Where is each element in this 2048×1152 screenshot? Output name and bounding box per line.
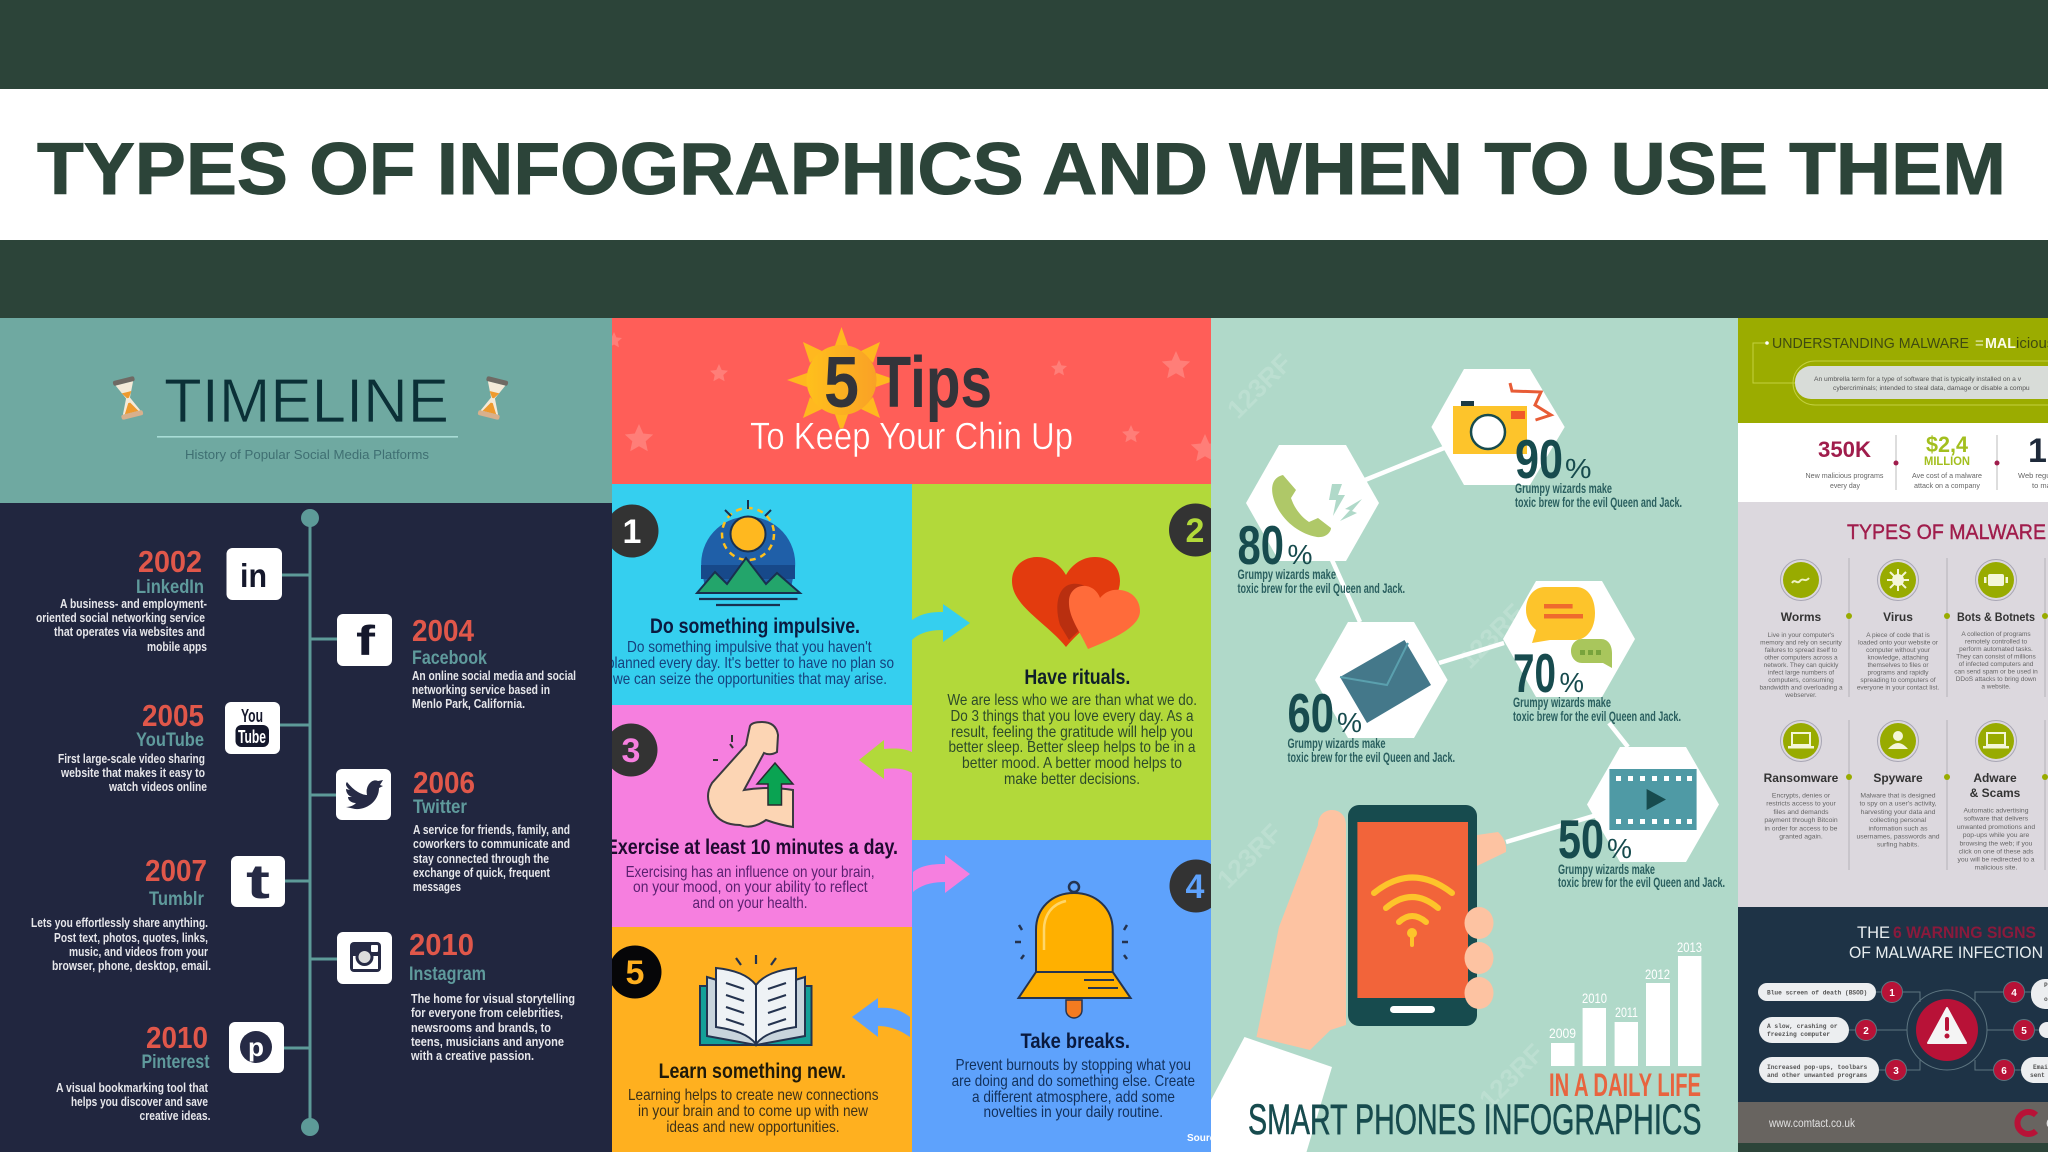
card: worms: Live in your computer's [1768, 632, 1835, 639]
malware stats [1806, 432, 2048, 490]
icon: chat bubbles [1526, 587, 1612, 668]
entry: Tumblr 2007: t [246, 856, 270, 909]
stat: 80%: % [1288, 539, 1312, 570]
entry: YouTube 2005: You [241, 706, 263, 726]
entry: Tumblr 2007: Post text, photos, quotes, links, [54, 930, 208, 945]
stat: 90%: % [1565, 453, 1592, 484]
card: adware and scams: you will be redirected to a [1957, 856, 2035, 864]
panel: smart phones infographic [1211, 318, 1738, 1152]
card: adware and scams: unwanted promotions and [1957, 824, 2035, 831]
tip 2: have rituals: better sleep. Better sleep helps to be in a [948, 739, 1196, 756]
card: ransomware: files and demands [1773, 809, 1829, 816]
entry: YouTube 2005: website that makes it easy to [60, 765, 205, 780]
card: bots and botnets: A collection of programs [1961, 631, 2031, 638]
card: adware and scams: Automatic advertising [1964, 808, 2029, 814]
tip 1: do something impulsive: Do something impulsive. [650, 615, 860, 638]
malware stats: Ave cost of a malware [1912, 471, 1982, 480]
warning signs 4 to 6: sent [2030, 1072, 2045, 1079]
warning signs 1 to 3: Blue screen of death (BSOD) [1767, 990, 1867, 996]
entry: Twitter 2006 [336, 765, 570, 894]
stat: 60%: % [1337, 707, 1362, 738]
heading: 6 warning signs [1849, 924, 2043, 962]
entry: Twitter 2006: coworkers to communicate and [413, 836, 570, 851]
footer: comtact: www.comtact.co.uk [1768, 1118, 1855, 1130]
card: worms: computers, consuming [1768, 677, 1834, 684]
warning signs 1 to 3: A slow, crashing or [1767, 1023, 1838, 1030]
bar chart: 2009-2013: 2009 [1549, 1025, 1576, 1041]
stock watermarks: 123RF [1473, 1038, 1549, 1114]
card: worms: bandwidth and overloading a [1759, 684, 1843, 692]
malware header: = [1975, 335, 1984, 352]
entry: Twitter 2006: exchange of quick, frequent [413, 865, 551, 880]
bar chart: 2009-2013: 2012 [1645, 966, 1670, 982]
card: adware and scams: Adware [1973, 771, 2017, 785]
icon: video film [1609, 769, 1697, 830]
warning connector lines [1849, 992, 2039, 1070]
warning signs 4 to 6: 5 [2021, 1026, 2027, 1037]
card: ransomware: Encrypts, denies or [1772, 792, 1831, 800]
tip 1: do something impulsive [606, 500, 894, 688]
stat: 60%: 60 [1288, 682, 1334, 744]
entry: Pinterest 2010: helps you discover and save [71, 1094, 208, 1109]
card: bots and botnets: can send spam or be used in [1954, 668, 2038, 676]
smart phones heading [1249, 1074, 1700, 1135]
entry: Tumblr 2007: music, and videos from your [69, 944, 208, 959]
card: virus: knowledge, attaching [1867, 654, 1929, 662]
malware stats: every day [1830, 481, 1860, 490]
card: adware and scams: malicious site. [1975, 864, 2017, 872]
entry: Pinterest 2010: creative ideas. [140, 1108, 210, 1123]
card: worms [1759, 560, 1843, 699]
entry: YouTube 2005 [58, 698, 280, 794]
card: adware and scams: browsing the web; if you [1960, 840, 2033, 848]
entry: Instagram 2010: 2010 [409, 927, 474, 962]
hexagon connector lines [1332, 448, 1628, 842]
malware header: An umbrella term for a type of software that is typically installed on a v [1814, 376, 2022, 383]
title band [0, 89, 2048, 240]
entry: Pinterest 2010: p [248, 1032, 264, 1062]
card: virus: programs and rapidly [1867, 670, 1929, 676]
card: ransomware: in order for access to be [1765, 826, 1838, 832]
arrow: tip 1 to tip 2 [912, 604, 970, 642]
card: ransomware: restricts access to your [1766, 800, 1836, 808]
card: spyware: Spyware [1873, 771, 1923, 785]
entry: Facebook 2004: 2004 [412, 613, 475, 648]
entry: Pinterest 2010: Pinterest [142, 1052, 210, 1073]
tip 3: exercise [604, 722, 898, 912]
tip 5: learn something new: Learning helps to create new connections [628, 1087, 878, 1104]
stat: 60%: toxic brew for the evil Queen and Jack. [1288, 749, 1455, 765]
card: bots and botnets: DDoS attacks to bring down [1956, 676, 2037, 683]
entry: Twitter 2006: 2006 [413, 765, 475, 800]
entry: LinkedIn 2002: 2002 [138, 544, 202, 579]
entry: LinkedIn 2002: that operates via websites and [54, 624, 205, 639]
arrow: tip 2 to tip 3 [859, 740, 912, 779]
malware stats: 1 [2028, 432, 2047, 470]
icon: envelope [1340, 640, 1431, 723]
card: virus: spreading to computers of [1860, 677, 1936, 684]
card: worms: memory and rely on security [1760, 640, 1843, 646]
footer: comtact [1768, 1112, 2048, 1134]
arrow: tip 4 to tip 5 [852, 998, 910, 1037]
warning signs 1 to 3: Increased pop-ups, toolbars [1767, 1064, 1868, 1071]
card: spyware: Malware that is designed [1860, 792, 1936, 800]
malware stats: attack on a company [1914, 481, 1980, 490]
hexagons [1246, 369, 1719, 862]
stat: 50% [1558, 820, 1724, 890]
panel: social media timeline [0, 318, 612, 1152]
stat: 70%: 70 [1513, 642, 1556, 704]
card: virus: computer without your [1866, 647, 1931, 654]
tip 4: take breaks: are doing and do something else. Create [952, 1073, 1195, 1090]
stat: 90%: Grumpy wizards make [1515, 480, 1612, 496]
tip 5: learn something new: Learn something new. [659, 1060, 846, 1083]
tip 4: take breaks: 4 [1186, 868, 1205, 906]
malware stats: New malicious programs [1806, 471, 1884, 480]
stat: 70%: % [1560, 667, 1584, 698]
card: worms: failures to spread itself to [1765, 647, 1838, 654]
bar chart: 2009-2013 [1549, 939, 1702, 1066]
warning signs 1 to 3: 3 [1893, 1066, 1899, 1077]
timeline heading [157, 367, 458, 462]
entry: Tumblr 2007: 2007 [145, 853, 207, 888]
heading: 6 warning signs: THE [1857, 924, 1890, 942]
entry: Pinterest 2010 [56, 1020, 284, 1123]
card: ransomware: granted again. [1779, 834, 1823, 840]
tip 2: have rituals: make better decisions. [1004, 771, 1140, 788]
icon: right hourglass [477, 376, 509, 420]
card: adware and scams [1957, 720, 2035, 872]
panel: 5 tips [604, 318, 1222, 1152]
subheading: To Keep Your Chin Up [750, 416, 1073, 458]
entry: Tumblr 2007: Tumblr [149, 889, 205, 910]
tip 1: do something impulsive: planned every day. It's better to have no plan so [607, 655, 894, 672]
tip 2: have rituals: We are less who we are than what we do. [947, 692, 1197, 709]
tip 4: take breaks [952, 860, 1222, 1144]
timeline heading: TIMELINE [164, 367, 449, 436]
card: bots and botnets [1954, 560, 2038, 690]
card: bots and botnets: of infected computers and [1959, 661, 2034, 668]
entry: YouTube 2005: YouTube [136, 730, 204, 751]
card: ransomware [1764, 720, 1839, 840]
background stars [606, 332, 1219, 461]
entry: LinkedIn 2002: mobile apps [147, 639, 207, 654]
entry: Instagram 2010: teens, musicians and anyone [411, 1034, 564, 1049]
tip 4: take breaks: a different atmosphere, add some [972, 1089, 1175, 1106]
stat: 70%: toxic brew for the evil Queen and Jack. [1513, 708, 1681, 724]
illustration: hand holding phone [1211, 805, 1506, 1152]
icon: telephone handset [1272, 475, 1362, 537]
timeline axis [280, 509, 337, 1136]
warning signs 4 to 6: 4 [2011, 988, 2017, 999]
warning signs 1 to 3: 2 [1863, 1026, 1869, 1037]
entry: Facebook 2004: Facebook [412, 648, 487, 669]
card: adware and scams: click on one of these ads [1959, 848, 2034, 856]
malware header: cybercriminals; intended to steal data, damage or disable a compu [1833, 385, 2030, 392]
stat: 90%: toxic brew for the evil Queen and Jack. [1515, 494, 1682, 510]
tip 5: learn something new: ideas and new opportunities. [666, 1119, 840, 1136]
card: bots and botnets: They can consist of millions [1956, 654, 2036, 660]
entry: LinkedIn 2002 [36, 544, 282, 654]
malware stats: 350K [1818, 437, 1871, 462]
tip 5: learn something new: 5 [626, 954, 644, 992]
card: virus: loaded onto your website or [1858, 640, 1939, 646]
malware header: UNDERSTANDING MALWARE [1772, 335, 1969, 352]
malware stats: MILLION [1924, 454, 1970, 468]
entry: Instagram 2010: newsrooms and brands, to [411, 1020, 551, 1035]
stock watermarks: 123RF [1211, 818, 1287, 894]
tip 3: exercise: on your mood, on your ability to reflect [633, 879, 868, 896]
tip 2: have rituals: 2 [1186, 512, 1204, 550]
stat: 50%: Grumpy wizards make [1558, 861, 1655, 877]
card: spyware: usernames, passwords and [1856, 834, 1940, 840]
tip 1: do something impulsive: 1 [623, 513, 641, 551]
warning signs 1 to 3: 1 [1889, 988, 1895, 999]
stat: 80%: toxic brew for the evil Queen and Jack. [1238, 580, 1405, 596]
warning signs 1 to 3: and other unwanted programs [1767, 1072, 1868, 1079]
warning signs 1 to 3: freezing computer [1767, 1031, 1830, 1038]
warning signs 4 to 6 [1994, 979, 2048, 1083]
timeline heading: History of Popular Social Media Platforms [185, 447, 430, 462]
tip 1: do something impulsive: Do something impulsive that you haven't [627, 639, 872, 656]
entry: Twitter 2006: stay connected through the [413, 851, 549, 866]
stat: 70%: Grumpy wizards make [1513, 694, 1611, 710]
smart phones heading: SMART PHONES INFOGRAPHICS [1248, 1096, 1702, 1144]
heading: 5 tips [826, 354, 990, 422]
tip 3: exercise: 3 [622, 732, 640, 770]
card: virus: themselves to files or [1867, 662, 1929, 669]
heading: 5 tips: Tips [876, 343, 992, 423]
card: virus: A piece of code that is [1866, 632, 1931, 639]
card: adware and scams: software that delivers [1964, 816, 2029, 822]
entry: LinkedIn 2002: in [240, 557, 267, 594]
tip 3: exercise: and on your health. [692, 895, 808, 912]
tip 2: have rituals: Do 3 things that you love every day. As a [950, 708, 1194, 725]
entry: Facebook 2004: Menlo Park, California. [412, 696, 525, 711]
stat: 60%: Grumpy wizards make [1288, 735, 1386, 751]
card: ransomware: Ransomware [1764, 771, 1839, 785]
warning signs 1 to 3 [1758, 982, 1906, 1083]
bar chart: 2009-2013: 2013 [1677, 939, 1702, 955]
entry: Facebook 2004: An online social media and social [412, 668, 576, 683]
smart phones heading: IN A DAILY LIFE [1549, 1067, 1701, 1103]
tip 4: take breaks: Source [1187, 1133, 1221, 1144]
icon: camera [1453, 383, 1551, 454]
tip 5: learn something new: in your brain and to come up with new [638, 1103, 868, 1120]
card: spyware: to spy on a user's activity, [1859, 800, 1937, 808]
entry: Twitter 2006: Twitter [413, 797, 468, 818]
tip 2: have rituals: better mood. A better mood helps to [962, 755, 1182, 772]
card: bots and botnets: remotely controlled to [1965, 638, 2027, 646]
entry: Tumblr 2007: browser, phone, desktop, email. [52, 958, 211, 973]
stat: 80%: 80 [1238, 514, 1284, 576]
card: worms: infect large numbers of [1768, 670, 1834, 676]
card: virus: everyone in your contact list. [1857, 684, 1939, 692]
card: spyware: information such as [1869, 826, 1928, 832]
card: bots and botnets: a website. [1981, 684, 2011, 690]
entry: Tumblr 2007 [31, 853, 285, 973]
tip 5: learn something new [608, 946, 878, 1136]
tip 1: do something impulsive: we can seize the opportunities that may arise. [612, 671, 887, 688]
malware stats: $2,4 [1926, 432, 1969, 457]
entry: Tumblr 2007: Lets you effortlessly share anything. [31, 915, 208, 930]
stat: 50%: 50 [1558, 808, 1604, 870]
warning signs 4 to 6: Emai [2033, 1064, 2048, 1071]
entry: Instagram 2010: The home for visual storytelling [411, 991, 575, 1006]
stat: 80%: Grumpy wizards make [1238, 566, 1336, 582]
stock watermarks [1211, 348, 1549, 1114]
bar chart: 2009-2013: 2010 [1582, 990, 1607, 1006]
entry: YouTube 2005: First large-scale video sharing [58, 751, 205, 766]
stat: 70% [1513, 654, 1680, 724]
entry: LinkedIn 2002: oriented social networking service [36, 610, 205, 625]
icon: warning triangle [1907, 990, 1987, 1070]
entry: Facebook 2004 [337, 613, 576, 711]
stat: 80% [1238, 526, 1404, 596]
entry: Facebook 2004: networking service based in [412, 682, 550, 697]
card: adware and scams: pop-ups while you are [1963, 832, 2029, 839]
entry: LinkedIn 2002: LinkedIn [136, 577, 204, 598]
arrow: tip 3 to tip 4 [913, 855, 970, 893]
heading: 6 warning signs: 6 WARNING SIGNS [1893, 924, 2036, 942]
entry: Pinterest 2010: 2010 [146, 1020, 208, 1055]
entry: Twitter 2006: messages [413, 879, 461, 894]
card: adware and scams: & Scams [1970, 786, 2021, 800]
tip 3: exercise: Exercising has an influence on your brain, [626, 864, 875, 881]
stock watermarks: 123RF [1453, 598, 1529, 674]
panel: understanding malware [1738, 318, 2048, 1143]
entry: YouTube 2005: 2005 [142, 698, 204, 733]
tip 4: take breaks: novelties in your daily routine. [984, 1104, 1163, 1121]
warning signs 4 to 6: 6 [2001, 1066, 2007, 1077]
warning signs 4 to 6: P [2044, 982, 2048, 989]
card: spyware [1856, 720, 1940, 848]
entry: Pinterest 2010: A visual bookmarking tool that [56, 1080, 209, 1095]
icon: sun [787, 327, 896, 433]
tip 2: have rituals: result, feeling the gratitude will help you [951, 724, 1193, 741]
card: worms: webserver. [1784, 692, 1817, 699]
stock watermarks: 123RF [1221, 348, 1297, 424]
card: spyware: harvesting your data and [1861, 809, 1936, 816]
card: spyware: surfing habits. [1877, 842, 1919, 848]
heading: 6 warning signs: OF MALWARE INFECTION [1849, 944, 2043, 962]
entry: Instagram 2010: with a creative passion. [410, 1048, 534, 1063]
stat: 50%: % [1607, 833, 1632, 864]
malware header: MAL [1985, 335, 2016, 352]
title band: TYPES OF INFOGRAPHICS AND WHEN TO USE THEM [37, 129, 2006, 210]
tip 3: exercise: Exercise at least 10 minutes a day. [606, 836, 898, 859]
stat: 90%: 90 [1515, 428, 1563, 490]
card: ransomware: payment through Bitcoin [1764, 817, 1838, 824]
card: bots and botnets: Bots & Botnets [1957, 610, 2035, 624]
card: worms: other computers across a [1764, 654, 1838, 662]
card: worms: Worms [1781, 610, 1822, 624]
entry: Instagram 2010: for everyone from celebrities, [411, 1005, 563, 1020]
card: virus [1857, 560, 1939, 692]
entry: Instagram 2010: Instagram [409, 964, 486, 985]
warning signs 4 to 6: o [2044, 996, 2048, 1003]
entry: YouTube 2005: Tube [238, 727, 266, 747]
tip 2: have rituals [947, 504, 1222, 788]
card: spyware: collecting personal [1870, 817, 1927, 824]
entry: Facebook 2004: f [356, 617, 376, 664]
stat: 90% [1515, 440, 1682, 510]
icon: left hourglass [112, 376, 144, 420]
card: bots and botnets: perform automated tasks. [1959, 646, 2033, 653]
malware header [1753, 335, 2048, 405]
tip 4: take breaks: Take breaks. [1020, 1030, 1130, 1053]
card: virus: Virus [1883, 610, 1913, 624]
entry: Twitter 2006: A service for friends, family, and [413, 822, 570, 837]
stat: 50%: toxic brew for the evil Queen and Jack. [1558, 874, 1725, 890]
tip 2: have rituals: Have rituals. [1024, 666, 1130, 689]
entry: YouTube 2005: watch videos online [108, 779, 207, 794]
entry: LinkedIn 2002: A business- and employment- [60, 596, 207, 611]
malware grid dividers [1846, 558, 2048, 870]
tip 4: take breaks: Prevent burnouts by stopping what you [956, 1057, 1191, 1074]
stat: 60% [1288, 694, 1454, 765]
card: worms: network. They can quickly [1764, 662, 1839, 669]
heading: 5 tips: 5 [824, 343, 859, 423]
entry: Instagram 2010 [337, 927, 575, 1063]
bar chart: 2009-2013: 2011 [1615, 1004, 1638, 1020]
